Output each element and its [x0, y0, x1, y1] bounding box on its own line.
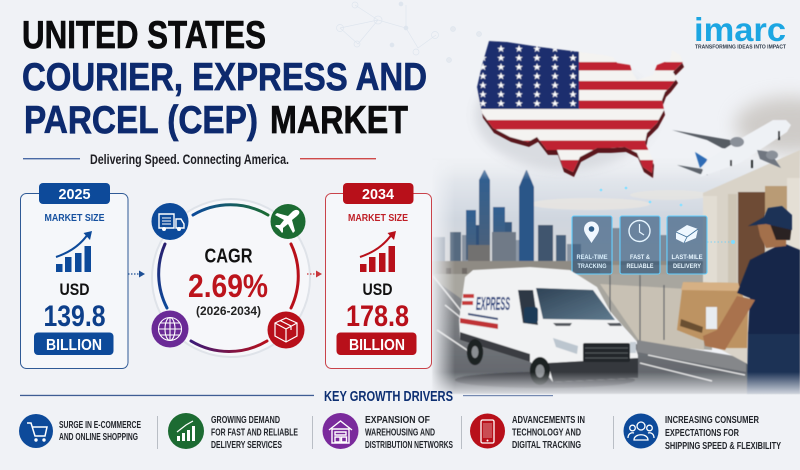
hair [770, 224, 792, 240]
haze behind airplane [735, 97, 800, 153]
icon: growth chart [168, 413, 204, 449]
driver: consumer expectations: EXPECTATIONS FOR [665, 428, 739, 439]
top fade [430, 150, 720, 180]
value 139.8: 139.8 [44, 300, 106, 333]
driver: consumer expectations [624, 414, 781, 452]
year badge 2025: 2025 [58, 187, 90, 203]
icon: smartphone [470, 414, 505, 448]
tail fin [695, 152, 708, 168]
panel: last-mile delivery: DELIVERY [673, 263, 702, 270]
billion badge: BILLION [46, 337, 102, 354]
US flag map [470, 35, 690, 180]
panel: last-mile delivery [667, 216, 707, 274]
CAGR label: CAGR [204, 246, 253, 268]
parcel [677, 282, 748, 348]
stabilizer [677, 165, 708, 175]
grille [583, 343, 630, 362]
cap [748, 206, 792, 230]
year badge 2034: 2034 [362, 187, 394, 203]
title line 3 navy part: PARCEL (CEP) [24, 99, 258, 142]
driver: consumer expectations: INCREASING CONSUMER [665, 415, 759, 426]
flag fill [476, 40, 684, 174]
panel: fast and reliable: RELIABLE [626, 263, 654, 270]
icon: globe [152, 310, 188, 348]
billion badge [34, 332, 114, 355]
USD label: USD [362, 280, 392, 299]
driver: technology and tracking: TECHNOLOGY AND [512, 428, 581, 438]
arrow: 2025 to CAGR [128, 270, 145, 278]
panel: real-time tracking: TRACKING [578, 263, 607, 270]
courier with parcel [677, 206, 800, 394]
driver: warehousing expansion: WAREHOUSING AND [365, 428, 435, 438]
icon: airplane [270, 204, 306, 239]
title line 1: UNITED STATES [22, 14, 266, 57]
title [22, 14, 427, 142]
icon: rising bar chart [56, 231, 92, 272]
icon: shopping cart [19, 414, 53, 448]
panel: 2034 market size [326, 183, 432, 368]
extruded edge [478, 46, 684, 178]
photo scene: city, road, van, courier [430, 150, 800, 398]
driver: warehousing expansion: DISTRIBUTION NETWORKS [365, 440, 453, 451]
icon: people group [624, 414, 658, 448]
panel: real-time tracking [572, 216, 612, 274]
near wing [757, 150, 781, 168]
arm [703, 296, 755, 350]
panel: 2025 market size [20, 183, 128, 368]
ring arcs [159, 205, 298, 352]
driver: e-commerce [19, 414, 141, 448]
imarc logo: TRANSFORMING IDEAS INTO IMPACT [695, 44, 787, 50]
driver: technology and tracking: ADVANCEMENTS IN [512, 415, 585, 426]
icon: parcel box [268, 312, 304, 348]
title line 2: COURIER, EXPRESS AND [22, 56, 427, 99]
neck and head [757, 222, 786, 248]
year badge 2034 [343, 183, 414, 204]
bottom fade [430, 372, 800, 398]
driver: fast delivery demand: DELIVERY SERVICES [211, 440, 282, 451]
road [432, 278, 800, 394]
value 178.8: 178.8 [346, 300, 409, 333]
CAGR ring [152, 199, 310, 357]
landing gear [731, 131, 779, 168]
van body [459, 267, 638, 382]
panel: real-time tracking: REAL-TIME [576, 254, 608, 261]
trousers [747, 332, 800, 394]
driver: technology and tracking: DIGITAL TRACKING [512, 440, 581, 451]
clouds [530, 198, 650, 210]
wing mirror [524, 307, 538, 323]
engines [730, 137, 744, 147]
billion badge: BILLION [349, 337, 405, 354]
icon: rising bar chart [360, 231, 396, 272]
billion badge [336, 332, 416, 355]
USD label: USD [60, 280, 90, 299]
windshield [536, 288, 615, 320]
panel: fast and reliable: FAST & [630, 254, 650, 261]
delivery van: EXPRESS [476, 294, 510, 314]
driver: warehousing expansion [322, 413, 453, 451]
icon: warehouse [322, 413, 358, 449]
market size label: MARKET SIZE [348, 212, 408, 224]
left fade [430, 160, 455, 395]
side window [518, 290, 538, 325]
title line 3 black part: MARKET [270, 99, 408, 142]
panel: last-mile delivery: LAST-MILE [672, 254, 703, 261]
driver: warehousing expansion: EXPANSION OF [365, 415, 430, 426]
side stripes [463, 294, 474, 298]
driver: fast delivery demand: GROWING DEMAND [211, 415, 280, 426]
driver: e-commerce: SURGE IN E-COMMERCE [59, 420, 141, 431]
skyline [433, 170, 667, 265]
driver: technology and tracking [470, 414, 585, 451]
driver: e-commerce: AND ONLINE SHOPPING [59, 432, 138, 443]
sky [432, 158, 800, 270]
side trim [460, 332, 530, 362]
front wheel [530, 357, 550, 385]
arrow: CAGR to 2034 [307, 270, 322, 278]
delivery van [455, 267, 638, 388]
key growth drivers heading: KEY GROWTH DRIVERS [324, 389, 453, 405]
airplane [672, 120, 791, 177]
overpass [432, 261, 712, 276]
holographic panels [572, 187, 735, 274]
far wing [672, 130, 734, 150]
rear wheel [467, 339, 483, 365]
network decoration [336, 2, 482, 62]
driver: fast delivery demand [168, 413, 298, 451]
fuselage [700, 120, 791, 177]
shirt [737, 243, 800, 334]
CAGR period: (2026-2034) [196, 306, 261, 318]
headlight [553, 338, 578, 354]
imarc logo: imarc [694, 11, 786, 48]
driver: fast delivery demand: FOR FAST AND RELIABLE [211, 428, 298, 438]
market size label: MARKET SIZE [44, 212, 104, 224]
tagline: Delivering Speed. Connecting America. [90, 152, 289, 167]
CAGR value: 2.69% [188, 268, 268, 304]
panel: fast and reliable [620, 216, 660, 274]
hood vents [553, 323, 622, 326]
guardrail [637, 340, 746, 372]
front bumper [548, 358, 638, 382]
icon: truck [152, 203, 188, 240]
year badge 2025 [39, 183, 110, 204]
ground behind van [432, 274, 712, 350]
building [703, 150, 800, 392]
